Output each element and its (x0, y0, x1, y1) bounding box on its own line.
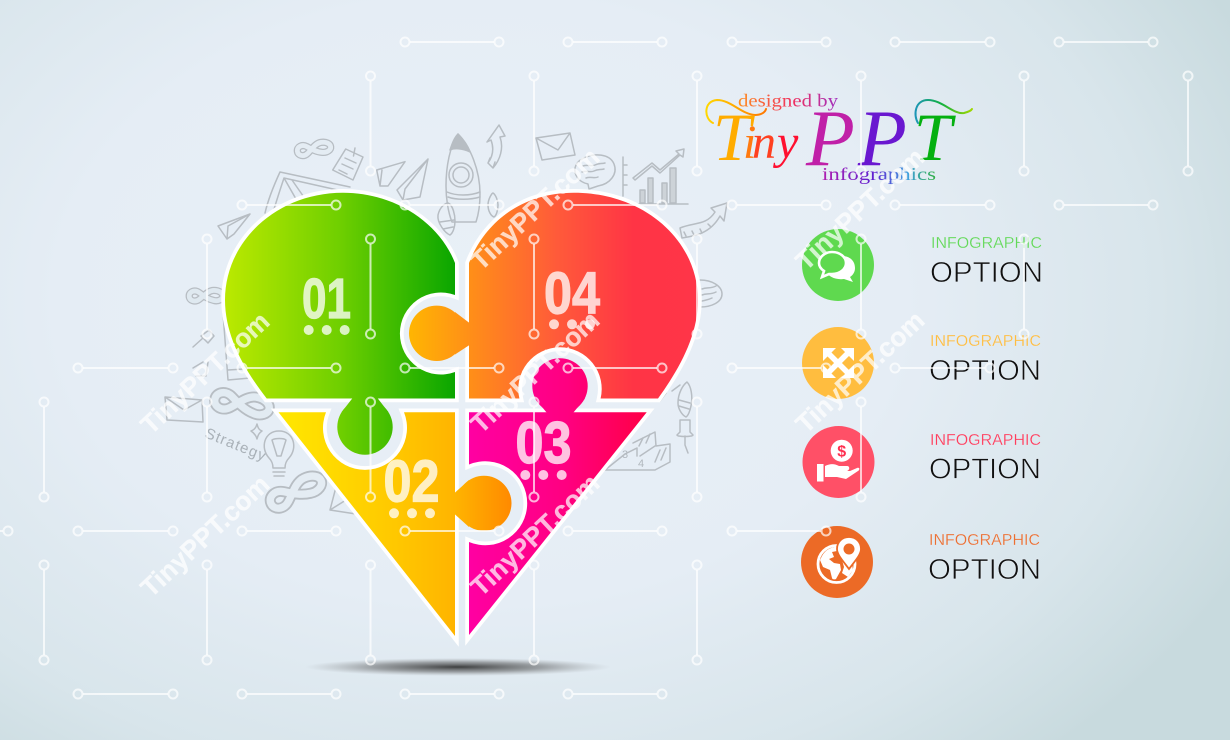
doodle stairs: 3 (622, 449, 628, 461)
icon: chat bubbles (802, 229, 874, 301)
logo: designed by TinyPPT infographics (706, 90, 972, 184)
doodle bubble right (700, 280, 722, 307)
logo line designed by: designed by (738, 90, 838, 110)
watermarks TinyPPT.com: TinyPPT.com (790, 305, 930, 439)
watermarks TinyPPT.com (135, 142, 930, 603)
doodle envelope (536, 133, 575, 160)
knob of piece 03 (532, 358, 588, 414)
watermarks TinyPPT.com: TinyPPT.com (790, 142, 930, 276)
knob of piece 02 (454, 476, 512, 531)
icon: expand arrows (802, 327, 874, 399)
label infographic 2: INFOGRAPHIC (930, 333, 1041, 350)
piece 01 green (225, 193, 455, 398)
logo wordmark: P (805, 95, 855, 183)
label option 1: OPTION (930, 257, 1043, 289)
logo wordmark: T (914, 99, 956, 175)
option 4 (801, 526, 1041, 598)
watermarks TinyPPT.com: TinyPPT.com (465, 468, 605, 602)
doodle note (333, 148, 363, 180)
piece 02 yellow (278, 412, 455, 636)
number 01 with dots: 01 (302, 267, 351, 331)
knob of piece 04 (409, 306, 470, 361)
logo swash right (915, 100, 972, 123)
doodle rocket (438, 134, 498, 235)
label infographic 4: INFOGRAPHIC (929, 532, 1040, 549)
doodle monitor (265, 172, 350, 216)
label infographic 3: INFOGRAPHIC (930, 432, 1041, 449)
icon: hand holding coin (802, 426, 874, 498)
icon: globe with pin (801, 526, 873, 598)
doodle infinity middle (213, 390, 271, 417)
logo line infographics: infographics (822, 164, 936, 184)
number 02 with dots: 02 (384, 448, 440, 514)
doodle up arrow (487, 125, 505, 168)
doodle paper plane left (218, 214, 250, 239)
watermarks TinyPPT.com: TinyPPT.com (135, 469, 275, 603)
doodle envelope left (165, 397, 203, 422)
logo wordmark: T (713, 99, 755, 175)
doodle strategy word: Strategy (203, 425, 269, 465)
logo wordmark: P (857, 95, 907, 183)
option 1 (802, 229, 1043, 301)
logo wordmark: i (743, 116, 756, 169)
doodle bar chart (623, 149, 688, 204)
puzzle heart (225, 193, 698, 636)
doodle stairs (605, 432, 670, 470)
doodle push pin (677, 420, 693, 453)
logo swash left (706, 100, 766, 123)
number 03 with dots: 03 (516, 410, 572, 476)
doodle stairs: 4 (638, 458, 644, 470)
label option 2: OPTION (929, 355, 1041, 387)
label option 3: OPTION (929, 454, 1041, 486)
label option 4: OPTION (928, 554, 1041, 586)
number 04 with dots: 04 (544, 260, 600, 326)
doodle infinity left (189, 290, 223, 301)
logo wordmark: n (752, 116, 776, 169)
label infographic 1: INFOGRAPHIC (931, 235, 1042, 252)
icon: hand holding coin: $ (837, 444, 846, 460)
piece 04 red (469, 193, 698, 398)
doodle small rocket right (654, 382, 692, 417)
doodle light bulb (264, 431, 294, 476)
doodle star (251, 424, 262, 439)
ground shadow under heart (305, 658, 611, 676)
option 2 (802, 327, 1041, 399)
doodle paper planes (377, 159, 428, 200)
doodle sketches behind heart (165, 125, 727, 514)
doodle speech bubble (575, 155, 615, 189)
doodle infinity top (297, 141, 331, 156)
knob of piece 01 (337, 398, 393, 455)
doodle envelope bottom (330, 487, 356, 514)
piece 03 pink (469, 412, 647, 635)
watermarks TinyPPT.com: TinyPPT.com (465, 142, 605, 276)
doodle pin left (193, 330, 214, 347)
watermarks TinyPPT.com: TinyPPT.com (465, 305, 605, 439)
puzzle knobs (337, 306, 588, 531)
logo wordmark: y (772, 116, 799, 169)
doodle curved arrow (680, 203, 727, 238)
doodle infinity bottom (267, 472, 324, 511)
doodle document left (193, 313, 250, 380)
watermarks TinyPPT.com: TinyPPT.com (135, 306, 275, 440)
option 3 (802, 426, 1041, 498)
